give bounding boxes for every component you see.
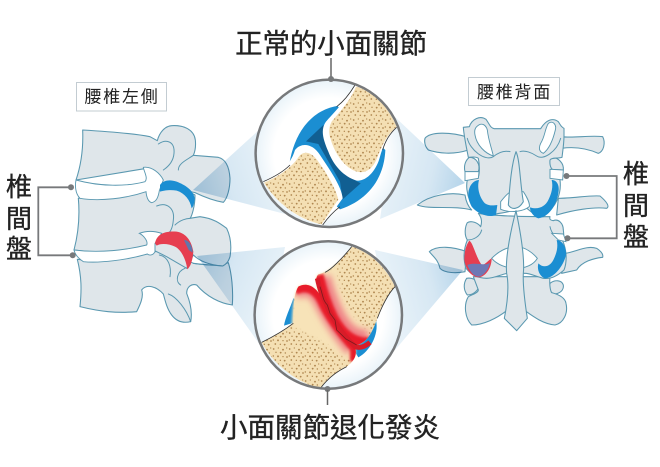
superior articular arcs	[467, 122, 561, 158]
vertebra 3	[77, 250, 233, 322]
disc gaps	[465, 169, 566, 242]
vertebra 2 body	[464, 213, 566, 279]
title: normal facet joint: 正常的小面關節	[235, 28, 427, 59]
lower bone	[262, 285, 356, 389]
joint cavity	[306, 125, 361, 199]
lower transverse processes	[429, 247, 603, 273]
inflamed facet: red	[464, 241, 492, 277]
spinous processes	[504, 152, 527, 331]
inflammation: upper bone	[318, 275, 372, 343]
label box: lumbar left side: 腰椎左側	[84, 88, 160, 106]
light cone: upper right	[380, 117, 465, 219]
inflamed facet: red	[155, 232, 193, 269]
lower bone	[263, 145, 343, 225]
normal facets: blue	[468, 180, 566, 278]
joint capsule	[289, 106, 385, 209]
normal facet: blue	[160, 180, 195, 208]
lower articular lobes	[464, 278, 563, 295]
vertebra 3	[465, 277, 567, 325]
vertebra 1	[76, 126, 230, 202]
label box: lumbar back side	[468, 78, 560, 106]
vertebra 2	[74, 183, 231, 268]
label: intervertebral disc, left: 椎	[6, 172, 32, 202]
inflamed joint gap	[317, 278, 370, 347]
label: intervertebral disc, right: 間	[623, 191, 649, 221]
upper articular lobes	[464, 157, 563, 172]
lumbar spine, side view	[74, 126, 233, 322]
middle transverse processes	[417, 194, 608, 215]
bracket: left discs	[38, 184, 76, 258]
label: intervertebral disc, right: 椎	[623, 159, 649, 189]
residual capsule	[284, 298, 377, 357]
disc 1	[75, 167, 163, 203]
callout stem: bottom	[324, 386, 330, 405]
joint line	[320, 287, 357, 345]
label box: lumbar back side: 腰椎背面	[477, 83, 552, 102]
callout stem: top	[328, 58, 334, 82]
upper bone	[323, 85, 398, 181]
inflammation: lower bone	[295, 287, 355, 362]
vertebra 1 body	[463, 118, 564, 217]
upper bone	[316, 247, 395, 345]
facet lines	[157, 141, 223, 322]
vertebra 2 lobe lines	[467, 227, 563, 241]
label box: lumbar left side	[76, 82, 166, 111]
callout: degenerated joint circle	[255, 241, 402, 389]
upper transverse processes	[425, 133, 604, 153]
lumbar spine, back view	[417, 118, 608, 331]
label: intervertebral disc, right: 盤	[623, 222, 649, 252]
disc 2	[74, 231, 162, 262]
bone outlines	[262, 247, 395, 389]
bracket: right discs	[564, 173, 617, 241]
circle outline	[255, 241, 402, 389]
callout: normal joint circle	[256, 80, 403, 227]
circle outline	[256, 80, 403, 227]
light cone: lower right	[375, 250, 463, 350]
title: facet joint degeneration: 小面關節退化發炎	[220, 412, 440, 443]
label: intervertebral disc, left: 間	[6, 204, 32, 234]
light cone: upper left	[193, 120, 285, 214]
foramina	[492, 192, 537, 268]
label: intervertebral disc, left: 盤	[6, 234, 32, 264]
light cone: lower left	[197, 247, 285, 352]
